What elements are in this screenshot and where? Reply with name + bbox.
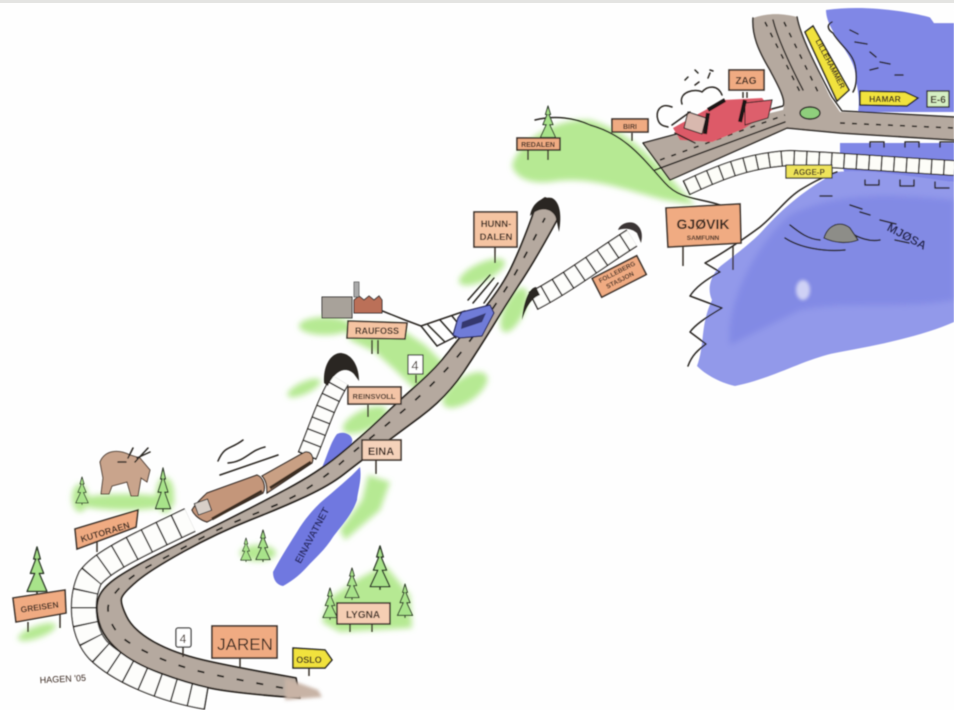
shoreline of Mjosa	[688, 172, 837, 366]
main rail line	[84, 520, 207, 697]
road sign 4 lower: 4	[180, 632, 187, 646]
sign: HAMAR arrow	[860, 91, 918, 106]
speed lines behind car	[468, 275, 498, 303]
sign: Kutoraen	[75, 510, 138, 552]
sign: Folleberg: STASJON	[605, 271, 636, 291]
rail across Raufoss	[421, 311, 466, 346]
truck	[672, 98, 772, 143]
sign: Reinsvoll	[348, 387, 401, 417]
water ripples	[785, 30, 909, 250]
sign: Jaren: JAREN	[217, 635, 273, 654]
main road	[97, 198, 557, 700]
green watercolor patches	[16, 120, 695, 644]
smoke puffs	[657, 70, 722, 127]
rail up to first tunnel	[307, 380, 340, 456]
blue car	[453, 305, 494, 338]
green hill outline	[535, 118, 720, 205]
sign: Raufoss: RAUFOSS	[355, 326, 399, 336]
sign: Lygna: LYGNA	[346, 610, 380, 621]
rail along Mjosa	[686, 158, 954, 188]
sign: Folleberg: FOLLEBERG	[598, 260, 637, 285]
sign: LILLEHAMMER: LILLEHAMMER	[813, 38, 847, 91]
lake: Einavatnet	[273, 433, 361, 586]
rock in lake	[824, 224, 858, 242]
sign: Oslo arrow: OSLO	[296, 655, 322, 665]
sign: GJOVIK: SAMFUNN	[687, 235, 720, 242]
sign: GJOVIK	[666, 204, 741, 270]
sign: Greisen: GREISEN	[20, 599, 59, 615]
trees by moose	[76, 468, 171, 512]
tree by Greisen	[27, 547, 47, 595]
sign: Oslo arrow	[293, 648, 332, 676]
tunnel 2 and 3	[618, 222, 642, 243]
sign: HAMAR arrow: HAMAR	[869, 94, 901, 104]
sign: Eina: EINA	[368, 446, 394, 458]
rail to second tunnel	[533, 238, 632, 301]
artist signature: HAGEN '05	[39, 673, 86, 685]
tree on hill	[540, 106, 556, 140]
upper road	[643, 14, 954, 180]
sign: LILLEHAMMER	[805, 26, 849, 101]
sign: Hunndalen	[474, 212, 517, 263]
factory	[322, 282, 382, 318]
sign: E-6: E-6	[930, 95, 946, 106]
hill sign left: REDALEN: REDALEN	[521, 142, 555, 149]
sign: E-6	[927, 91, 949, 107]
sign: GJOVIK: GJØVIK	[677, 216, 729, 232]
road sign 4 lower	[176, 628, 191, 657]
bridge supports	[865, 142, 954, 188]
sign: AGGE-P: AGGE-P	[793, 168, 825, 177]
sign: Lygna	[337, 603, 390, 632]
hill sign: BIRI	[612, 119, 648, 141]
road sign 4 upper: 4	[411, 358, 419, 373]
trees at Lygna	[323, 546, 413, 620]
train motion lines	[218, 440, 278, 475]
train	[192, 452, 313, 522]
hill sign left: REDALEN	[517, 138, 560, 160]
moose	[100, 448, 150, 496]
sign: Kutoraen: KUTORAEN	[79, 520, 131, 544]
sign: ZAG: ZAG	[735, 76, 757, 87]
lake: Einavatnet: EINAVATNET	[293, 506, 332, 566]
sign: Raufoss	[347, 321, 407, 354]
lake: Mjosa upper	[826, 8, 954, 112]
sign: Folleberg	[592, 256, 646, 297]
sign: ZAG	[729, 70, 764, 98]
tunnel 1	[324, 353, 359, 386]
sign: Greisen	[13, 590, 66, 632]
sign: Reinsvoll: REINSVOLL	[353, 392, 396, 401]
trees by road	[241, 530, 270, 562]
sign: Jaren	[212, 626, 277, 668]
sign: Eina	[362, 440, 401, 474]
sign: Hunndalen: DALEN	[480, 232, 512, 243]
label: Mjosa: MJØSA	[885, 220, 929, 253]
sign: Hunndalen: HUNN-	[481, 219, 511, 230]
lake: Mjosa lower	[697, 171, 954, 386]
hill sign: BIRI: BIRI	[623, 124, 637, 131]
sign: AGGE-P	[786, 165, 832, 178]
roundabout	[800, 107, 820, 119]
road sign 4 upper	[408, 355, 423, 383]
hill line to Raufoss rail	[380, 310, 437, 346]
tunnel 4 (road)	[530, 198, 560, 232]
